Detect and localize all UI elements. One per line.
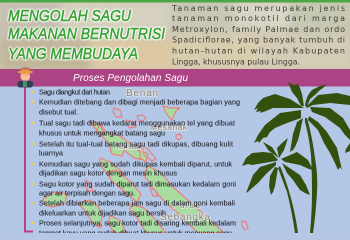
large palm (254, 82, 350, 233)
intro paragraph (171, 4, 345, 66)
process steps text: Kemudian ditebang dan dibagi menjadi beberapa bagian yang (39, 98, 240, 107)
process steps text: luarnya (39, 149, 63, 158)
process steps text: Kemudian sagu yang sudah dikupas kembali diparut, untuk (39, 160, 232, 169)
title (8, 8, 166, 63)
process steps text: dikeluarkan untuk dijadikan sagu bersih. (39, 209, 168, 218)
title: YANG MEMBUDAYA (8, 46, 138, 63)
top green bar (0, 0, 350, 2)
icon: farmer (18, 68, 33, 88)
map place labels: Temiang (115, 142, 145, 151)
heading band: Proses Pengolahan Sagu (73, 73, 188, 84)
icon: palm trees (242, 82, 350, 233)
heading band (0, 69, 350, 86)
process steps text: dijadikan sagu kotor dengan mesin khusus (39, 169, 177, 178)
process steps text: Tual sagu tadi dibawa kedarat menggunakan tel yang dibuat (39, 119, 235, 128)
map place labels: Benan (126, 88, 158, 99)
third palm fragment (345, 143, 350, 153)
map place labels (115, 88, 210, 223)
intro paragraph: Spadiciflorae, yang banyak tumbuh di (172, 36, 345, 45)
small palm (242, 138, 313, 233)
map of Lingga islands (43, 106, 248, 233)
process steps text: Sagu diangkut dari hutan (39, 88, 110, 97)
panel: process background (0, 86, 350, 233)
process steps text: Setelah itu tual-tual batang sagu tadi dikupas, dibuang kulit (39, 140, 233, 149)
title: MENGOLAH SAGU (8, 8, 132, 25)
map place labels: Pulau (173, 201, 200, 210)
process bullets (32, 91, 34, 224)
process steps text: Proses selanjutnya, sagu kotor tadi disaring kembali kedalam (39, 219, 236, 228)
title: MAKANAN BERNUTRISI (8, 26, 166, 43)
timeline line (25, 86, 33, 232)
process steps text: disebut tual. (39, 108, 78, 117)
intro paragraph: Lingga, khususnya pulau Lingga. (172, 57, 300, 66)
process steps text (39, 88, 240, 237)
intro paragraph: Tanaman sagu merupakan jenis (171, 4, 345, 13)
process steps text: khusus untuk mengangkat batang sagu (39, 129, 165, 138)
map place labels: Sebangka (160, 212, 210, 223)
map place labels: Mesanak (150, 122, 188, 132)
intro paragraph: tanaman monokotil dari marga (172, 14, 345, 23)
process steps text: Setelah dibiarkan beberapa jam sagu di dalam goni kembali (39, 199, 235, 208)
process steps text: Sagu kotor yang sudah diparut tadi dimasukan kedalam goni (39, 180, 236, 189)
intro paragraph: Metroxylon, family Palmae dan ordo (172, 25, 345, 34)
process steps text: agar air terpisah dengan sagu. (39, 189, 135, 198)
panel: header photo background (0, 0, 350, 70)
intro paragraph: hutan-hutan di wilayah Kabupaten (172, 46, 345, 55)
